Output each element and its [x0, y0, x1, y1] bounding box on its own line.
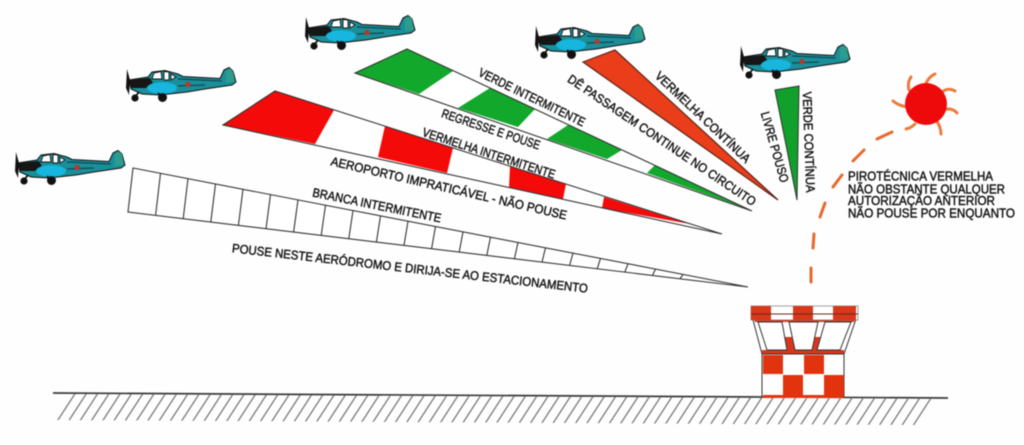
pyrotechnic text [848, 168, 1015, 220]
pyrotechnic text: NÃO OBSTANTE QUALQUER [848, 182, 1005, 196]
label: de passagem continue no circuito: DÊ PASSAGEM CONTINUE NO CIRCUITO [565, 71, 759, 209]
tower checker base [762, 354, 844, 398]
icon: red flare sun [893, 74, 957, 134]
airplane 2 [126, 68, 236, 102]
ground hatching [52, 394, 941, 425]
label: vermelha intermitente: VERMELHA INTERMITENTE [421, 125, 557, 182]
beam: white flashing [128, 168, 748, 287]
label: livre pouso: LIVRE POUSO [758, 110, 791, 184]
flare trajectory [811, 132, 892, 282]
beam: green flashing [355, 49, 752, 211]
ground line [53, 393, 948, 398]
beam: continuous green [775, 86, 799, 200]
label: vermelha continua: VERMELHA CONTÍNUA [652, 68, 754, 166]
label: aeroporto impraticavel: AEROPORTO IMPRATICÁVEL - NÃO POUSE [329, 153, 569, 223]
label: verde continua: VERDE CONTÍNUA [800, 91, 818, 193]
control tower [751, 306, 858, 398]
tower roof band [751, 306, 858, 320]
label: branca intermitente: BRANCA INTERMITENTE [311, 186, 442, 225]
beam: continuous red [583, 50, 778, 200]
pyrotechnic text: PIROTÉCNICA VERMELHA [848, 168, 994, 184]
airplane 3 [305, 16, 415, 50]
airplane 1 [15, 150, 125, 185]
label: verde intermitente: VERDE INTERMITENTE [476, 66, 587, 129]
label: pouse neste aerodromo: POUSE NESTE AERÓDROMO E DIRIJA-SE AO ESTACIONAMENTO [231, 240, 589, 296]
label: regresse e pouse: REGRESSE E POUSE [440, 106, 542, 152]
pyrotechnic text: AUTORIZAÇÃO ANTERIOR [848, 194, 995, 208]
tower windows [758, 322, 851, 350]
airplane 5 [740, 44, 850, 79]
pyrotechnic text: NÃO POUSE POR ENQUANTO [848, 206, 1015, 220]
tower cab frame [752, 316, 857, 354]
beam: red flashing [223, 91, 722, 234]
airplane 4 [535, 24, 645, 59]
